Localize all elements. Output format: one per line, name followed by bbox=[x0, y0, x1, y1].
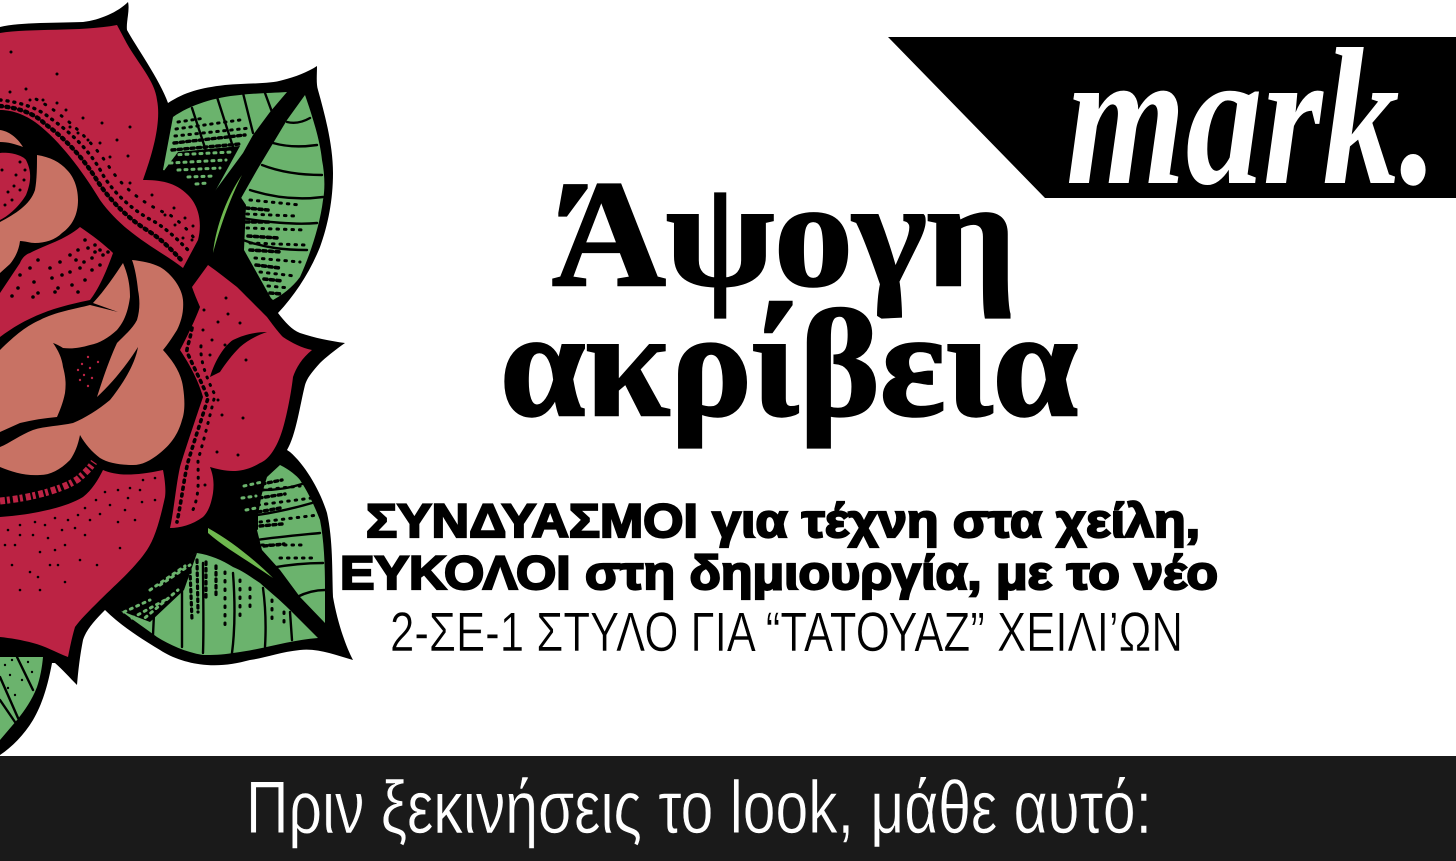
top petal bbox=[0, 25, 200, 268]
lower leaf upper half bbox=[257, 465, 325, 623]
small top salmon petal bbox=[0, 130, 23, 147]
rose black silhouette bbox=[0, 2, 353, 755]
leaf stem highlight bbox=[208, 528, 273, 578]
footer bar bbox=[0, 756, 1456, 861]
right petal stipple bbox=[203, 298, 246, 485]
footer background bbox=[0, 756, 1456, 861]
bottom left stipple bbox=[5, 660, 32, 695]
leaf stem highlight bbox=[213, 175, 242, 253]
stippled crescent band bbox=[0, 462, 94, 501]
footer text: Πριν ξεκινήσεις το look, μάθε αυτό: bbox=[246, 766, 1152, 849]
subtitle text block bbox=[340, 494, 1218, 663]
lower leaf lower half bbox=[120, 553, 318, 655]
leaf: upper right bbox=[163, 92, 324, 300]
bottom left veins bbox=[0, 657, 33, 722]
dense stipple along petal edge bbox=[0, 100, 188, 250]
green speckle on black bbox=[124, 482, 262, 622]
upper leaf left half bbox=[163, 92, 287, 195]
right petal crease bbox=[210, 332, 267, 377]
green speckle on black bbox=[170, 152, 232, 184]
veins bbox=[153, 484, 325, 653]
inner left red petal bbox=[0, 153, 30, 220]
leaf: lower right bbox=[119, 465, 325, 655]
veins bbox=[192, 93, 323, 250]
top petal stipple bbox=[10, 52, 193, 240]
bottom petal bbox=[0, 470, 165, 657]
middle red petal bbox=[0, 227, 113, 337]
banner shape bbox=[888, 37, 1456, 198]
leaf: bottom left bbox=[0, 657, 43, 740]
logo banner bbox=[888, 9, 1456, 226]
subtitle line 3: 2-ΣΕ-1 ΣΤΥΛΟ ΓΙΑ “ΤΑΤΟΥΑΖ” ΧΕΙΛΙ’ΩΝ bbox=[390, 600, 1183, 663]
centre salmon petal bbox=[0, 263, 130, 432]
lower salmon petal bbox=[0, 260, 184, 475]
bottom petal stipple bbox=[5, 478, 155, 590]
right petal bbox=[170, 265, 312, 528]
illustration: tattoo rose bbox=[0, 2, 353, 755]
title bbox=[500, 150, 1078, 448]
lower leaf speckled shading bbox=[119, 553, 197, 622]
bottom left leaf body bbox=[0, 657, 43, 740]
upper leaf speckled shading bbox=[163, 146, 240, 197]
subtitle line 2: ΕΥΚΟΛΟΙ στη δημιουργία, με το νέο bbox=[340, 546, 1218, 599]
upper salmon petal bbox=[0, 155, 78, 273]
subtitle line 1: ΣΥΝΔΥΑΣΜΟΙ για τέχνη στα χείλη, bbox=[366, 494, 1200, 547]
dark pocket dots bbox=[78, 357, 98, 386]
upper leaf right half bbox=[240, 95, 324, 300]
shading dots on leaf bbox=[258, 480, 285, 546]
title line 1: Άψογη bbox=[552, 150, 1016, 318]
title line 2: ακρίβεια bbox=[500, 280, 1078, 448]
shading dots on leaf bbox=[175, 118, 250, 136]
